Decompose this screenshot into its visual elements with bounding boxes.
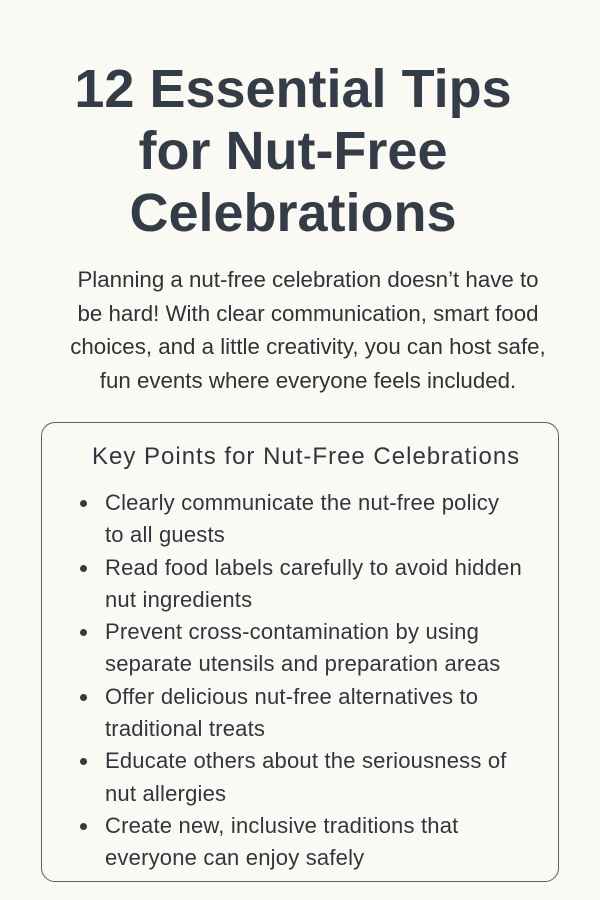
bullet list: Prevent cross-contamination by using <box>105 619 479 644</box>
bullet list: Create new, inclusive traditions that <box>105 813 458 838</box>
bullet list: Educate others about the seriousness of <box>105 748 507 773</box>
bullet list: Clearly communicate the nut-free policy <box>105 490 499 515</box>
title: for Nut-Free <box>138 121 448 181</box>
intro text <box>70 267 546 392</box>
title: Celebrations <box>129 183 457 243</box>
intro text: be hard! With clear communication, smart food <box>78 300 538 326</box>
bullet list: nut allergies <box>105 781 226 806</box>
intro text: Planning a nut-free celebration doesn’t have to <box>77 267 539 292</box>
bullet list: Offer delicious nut-free alternatives to <box>105 684 478 709</box>
bullet list: Read food labels carefully to avoid hidden <box>105 555 522 580</box>
panel heading: Key Points for Nut-Free Celebrations <box>92 443 520 470</box>
intro text: choices, and a little creativity, you can host safe, <box>70 334 546 359</box>
bullet list <box>80 490 522 870</box>
intro text: fun events where everyone feels included. <box>100 368 516 392</box>
bullet list: everyone can enjoy safely <box>105 845 364 870</box>
bullet list: nut ingredients <box>105 587 252 612</box>
panel: key points <box>41 422 559 882</box>
bullet list: traditional treats <box>105 716 265 741</box>
title <box>74 59 512 243</box>
title: 12 Essential Tips <box>74 59 512 119</box>
bullet list: to all guests <box>105 522 225 547</box>
bullet list: separate utensils and preparation areas <box>105 651 500 676</box>
